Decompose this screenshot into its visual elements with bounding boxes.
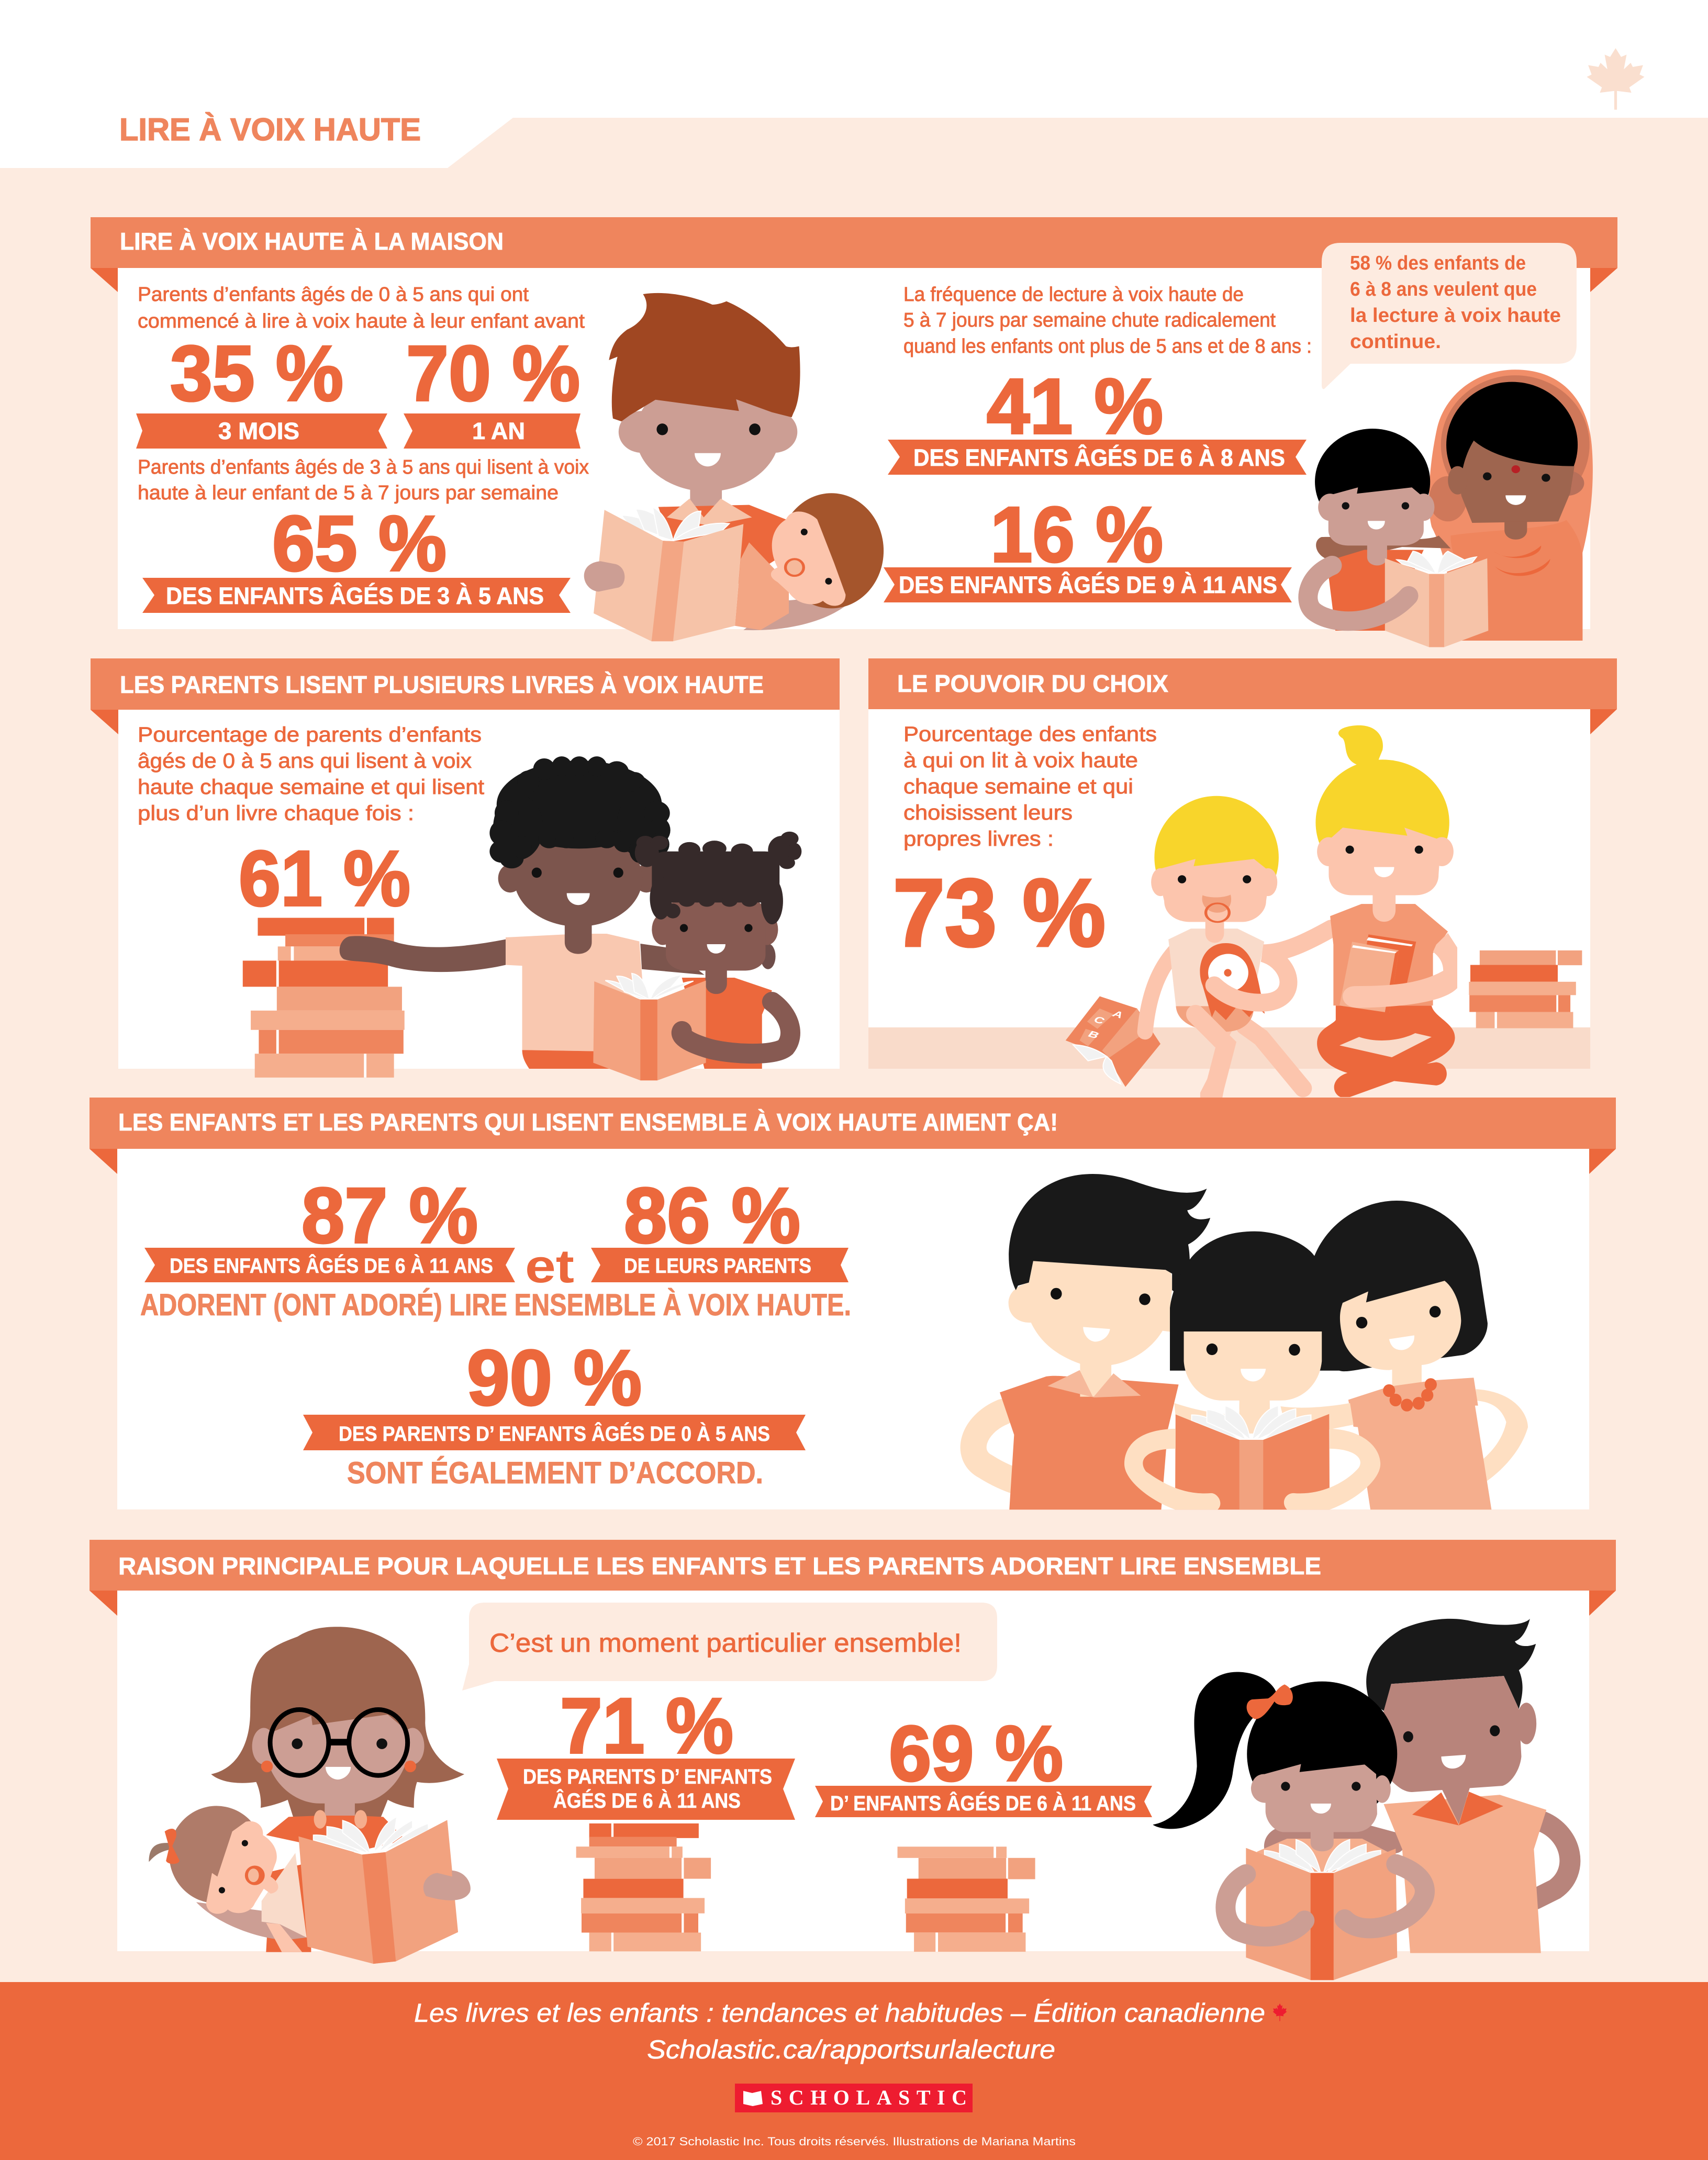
title: LIRE À VOIX HAUTE xyxy=(119,112,421,147)
word: et: et xyxy=(525,1240,574,1293)
stat: 70 % 1 an: 1 AN xyxy=(472,418,525,444)
statement: SONT ÉGALEMENT D’ACCORD. xyxy=(347,1456,763,1490)
text block: propres livres : xyxy=(903,827,1054,850)
text block: fréquence: quand les enfants ont plus de 5 ans et de 8 ans : xyxy=(903,335,1312,357)
illustration: father and daughter xyxy=(1153,1619,1570,1980)
callout: 58 %: 6 à 8 ans veulent que xyxy=(1350,278,1537,300)
book stack: 71 % xyxy=(576,1823,711,1951)
illustration: two children and books: B xyxy=(1086,1029,1101,1040)
logo: Scholastic xyxy=(735,2084,973,2112)
stat: 35 % 3 mois: 35 % xyxy=(170,329,343,417)
illustration: two children and books: C xyxy=(1091,1014,1107,1026)
stat: 41 %: 41 % xyxy=(987,362,1163,450)
stat: 16 % xyxy=(884,490,1292,602)
stat: 69 %: 69 % xyxy=(889,1709,1063,1797)
callout: 58 %: la lecture à voix haute xyxy=(1350,305,1561,327)
illustration: parent, child and book stack xyxy=(243,756,801,1080)
text block: fréquence: 5 à 7 jours par semaine chute radicalement xyxy=(903,309,1276,331)
stat: 71 %: ÂGÉS DE 6 À 11 ANS xyxy=(553,1788,741,1812)
stat: 69 % xyxy=(815,1709,1152,1817)
callout: 58 % xyxy=(1322,243,1577,389)
statement: ADORENT (ONT ADORÉ) LIRE ENSEMBLE À VOIX HAUTE. xyxy=(140,1288,851,1322)
panel: plusieurs livres xyxy=(91,658,840,1080)
stat: 86 % xyxy=(591,1171,849,1282)
banner xyxy=(91,658,840,710)
stat: 35 % 3 mois: 3 MOIS xyxy=(218,418,299,444)
stat: 61 %: 61 % xyxy=(239,834,410,922)
stat: 71 % xyxy=(497,1682,795,1820)
text block xyxy=(903,723,1157,850)
stat: 41 % xyxy=(888,362,1307,475)
footer xyxy=(0,1982,1708,2160)
text block: parents 3 à 5 ans xyxy=(138,456,589,504)
book stack: 69 % xyxy=(898,1846,1035,1952)
illustration: mother and baby xyxy=(149,1627,471,1964)
banner xyxy=(90,1098,1616,1149)
illustration: two children and books: A xyxy=(1110,1009,1126,1020)
callout: 58 %: 58 % des enfants de xyxy=(1350,252,1526,274)
panel: lire à la maison xyxy=(91,217,1617,647)
footer title: Les livres et les enfants : tendances et habitudes – Édition canadienne xyxy=(414,1998,1265,2028)
footer link: Scholastic.ca/rapportsurlalecture xyxy=(647,2035,1055,2064)
stat: 86 %: DE LEURS PARENTS xyxy=(624,1255,811,1278)
text block: plus d’un livre chaque fois : xyxy=(138,802,414,825)
banner: LES PARENTS LISENT PLUSIEURS LIVRES À VOIX HAUTE xyxy=(120,671,764,698)
panel: aiment ça xyxy=(90,1098,1616,1509)
text block: fréquence: La fréquence de lecture à voix haute de xyxy=(903,284,1244,306)
illustration: family reading xyxy=(974,1174,1528,1509)
text block: parents 3 à 5 ans: haute à leur enfant de 5 à 7 jours par semaine xyxy=(138,482,559,504)
stat: 90 % xyxy=(303,1334,806,1450)
banner xyxy=(868,658,1617,709)
text block: chaque semaine et qui xyxy=(903,775,1133,798)
banner: LE POUVOIR DU CHOIX xyxy=(897,670,1168,697)
icon: maple leaf xyxy=(1587,48,1645,110)
text block: haute chaque semaine et qui lisent xyxy=(138,776,484,799)
stat: 35 % 3 mois xyxy=(136,329,387,449)
text block xyxy=(138,723,484,825)
text block: parents 0 à 5 ans: commencé à lire à voix haute à leur enfant avant xyxy=(138,310,585,332)
callout: moment particulier: C’est un moment particulier ensemble! xyxy=(489,1628,962,1658)
stat: 90 %: DES PARENTS D’ ENFANTS ÂGÉS DE 0 À 5 ANS xyxy=(339,1422,770,1446)
text block: parents 0 à 5 ans xyxy=(138,284,585,332)
stat: 87 % xyxy=(144,1171,515,1282)
stat: 87 %: 87 % xyxy=(302,1171,478,1259)
stat: 87 %: DES ENFANTS ÂGÉS DE 6 À 11 ANS xyxy=(170,1254,493,1278)
text block: Pourcentage des enfants xyxy=(903,723,1157,746)
text block: Pourcentage de parents d’enfants xyxy=(138,723,482,746)
banner: LIRE À VOIX HAUTE À LA MAISON xyxy=(120,228,504,255)
callout: 58 %: continue. xyxy=(1350,331,1441,353)
stat: 65 % xyxy=(142,499,571,613)
banner: LES ENFANTS ET LES PARENTS QUI LISENT ENSEMBLE À VOIX HAUTE AIMENT ÇA! xyxy=(118,1109,1058,1136)
callout: moment particulier xyxy=(462,1603,997,1691)
logo: Scholastic: SCHOLASTIC xyxy=(771,2086,967,2109)
text block: âgés de 0 à 5 ans qui lisent à voix xyxy=(138,749,472,773)
stat: 71 %: 71 % xyxy=(560,1682,733,1770)
stat: 65 %: 65 % xyxy=(272,499,446,587)
stat: 65 %: DES ENFANTS ÂGÉS DE 3 À 5 ANS xyxy=(166,583,544,609)
copyright: © 2017 Scholastic Inc. Tous droits réservés. Illustrations de Mariana Martins xyxy=(633,2135,1076,2148)
banner: RAISON PRINCIPALE POUR LAQUELLE LES ENFANTS ET LES PARENTS ADORENT LIRE ENSEMBLE xyxy=(118,1552,1321,1580)
stat: 69 %: D’ ENFANTS ÂGÉS DE 6 À 11 ANS xyxy=(830,1791,1136,1815)
illustration: two children and books xyxy=(1066,725,1582,1099)
panel: raison principale xyxy=(90,1540,1616,1980)
panel: pouvoir du choix xyxy=(868,658,1617,1099)
text block: choisissent leurs xyxy=(903,801,1073,824)
text block: à qui on lit à voix haute xyxy=(903,749,1138,772)
stat: 16 %: 16 % xyxy=(990,490,1163,578)
icon: red maple leaf xyxy=(1273,2004,1287,2021)
text block: parents 0 à 5 ans: Parents d’enfants âgés de 0 à 5 ans qui ont xyxy=(138,284,529,306)
stat: 86 %: 86 % xyxy=(624,1171,800,1259)
stat: 71 %: DES PARENTS D’ ENFANTS xyxy=(523,1765,772,1788)
illustration: mother and child xyxy=(1308,370,1593,647)
stat: 73 %: 73 % xyxy=(893,859,1106,966)
stat: 41 %: DES ENFANTS ÂGÉS DE 6 À 8 ANS xyxy=(913,444,1285,471)
stat: 90 %: 90 % xyxy=(467,1334,642,1422)
banner xyxy=(91,217,1617,268)
text block: parents 3 à 5 ans: Parents d’enfants âgés de 3 à 5 ans qui lisent à voix xyxy=(138,456,589,478)
banner xyxy=(90,1540,1616,1591)
illustration: father and baby xyxy=(584,293,884,641)
stat: 70 % 1 an: 70 % xyxy=(406,329,580,417)
stat: 16 %: DES ENFANTS ÂGÉS DE 9 À 11 ANS xyxy=(899,572,1277,598)
text block: fréquence xyxy=(903,284,1312,357)
